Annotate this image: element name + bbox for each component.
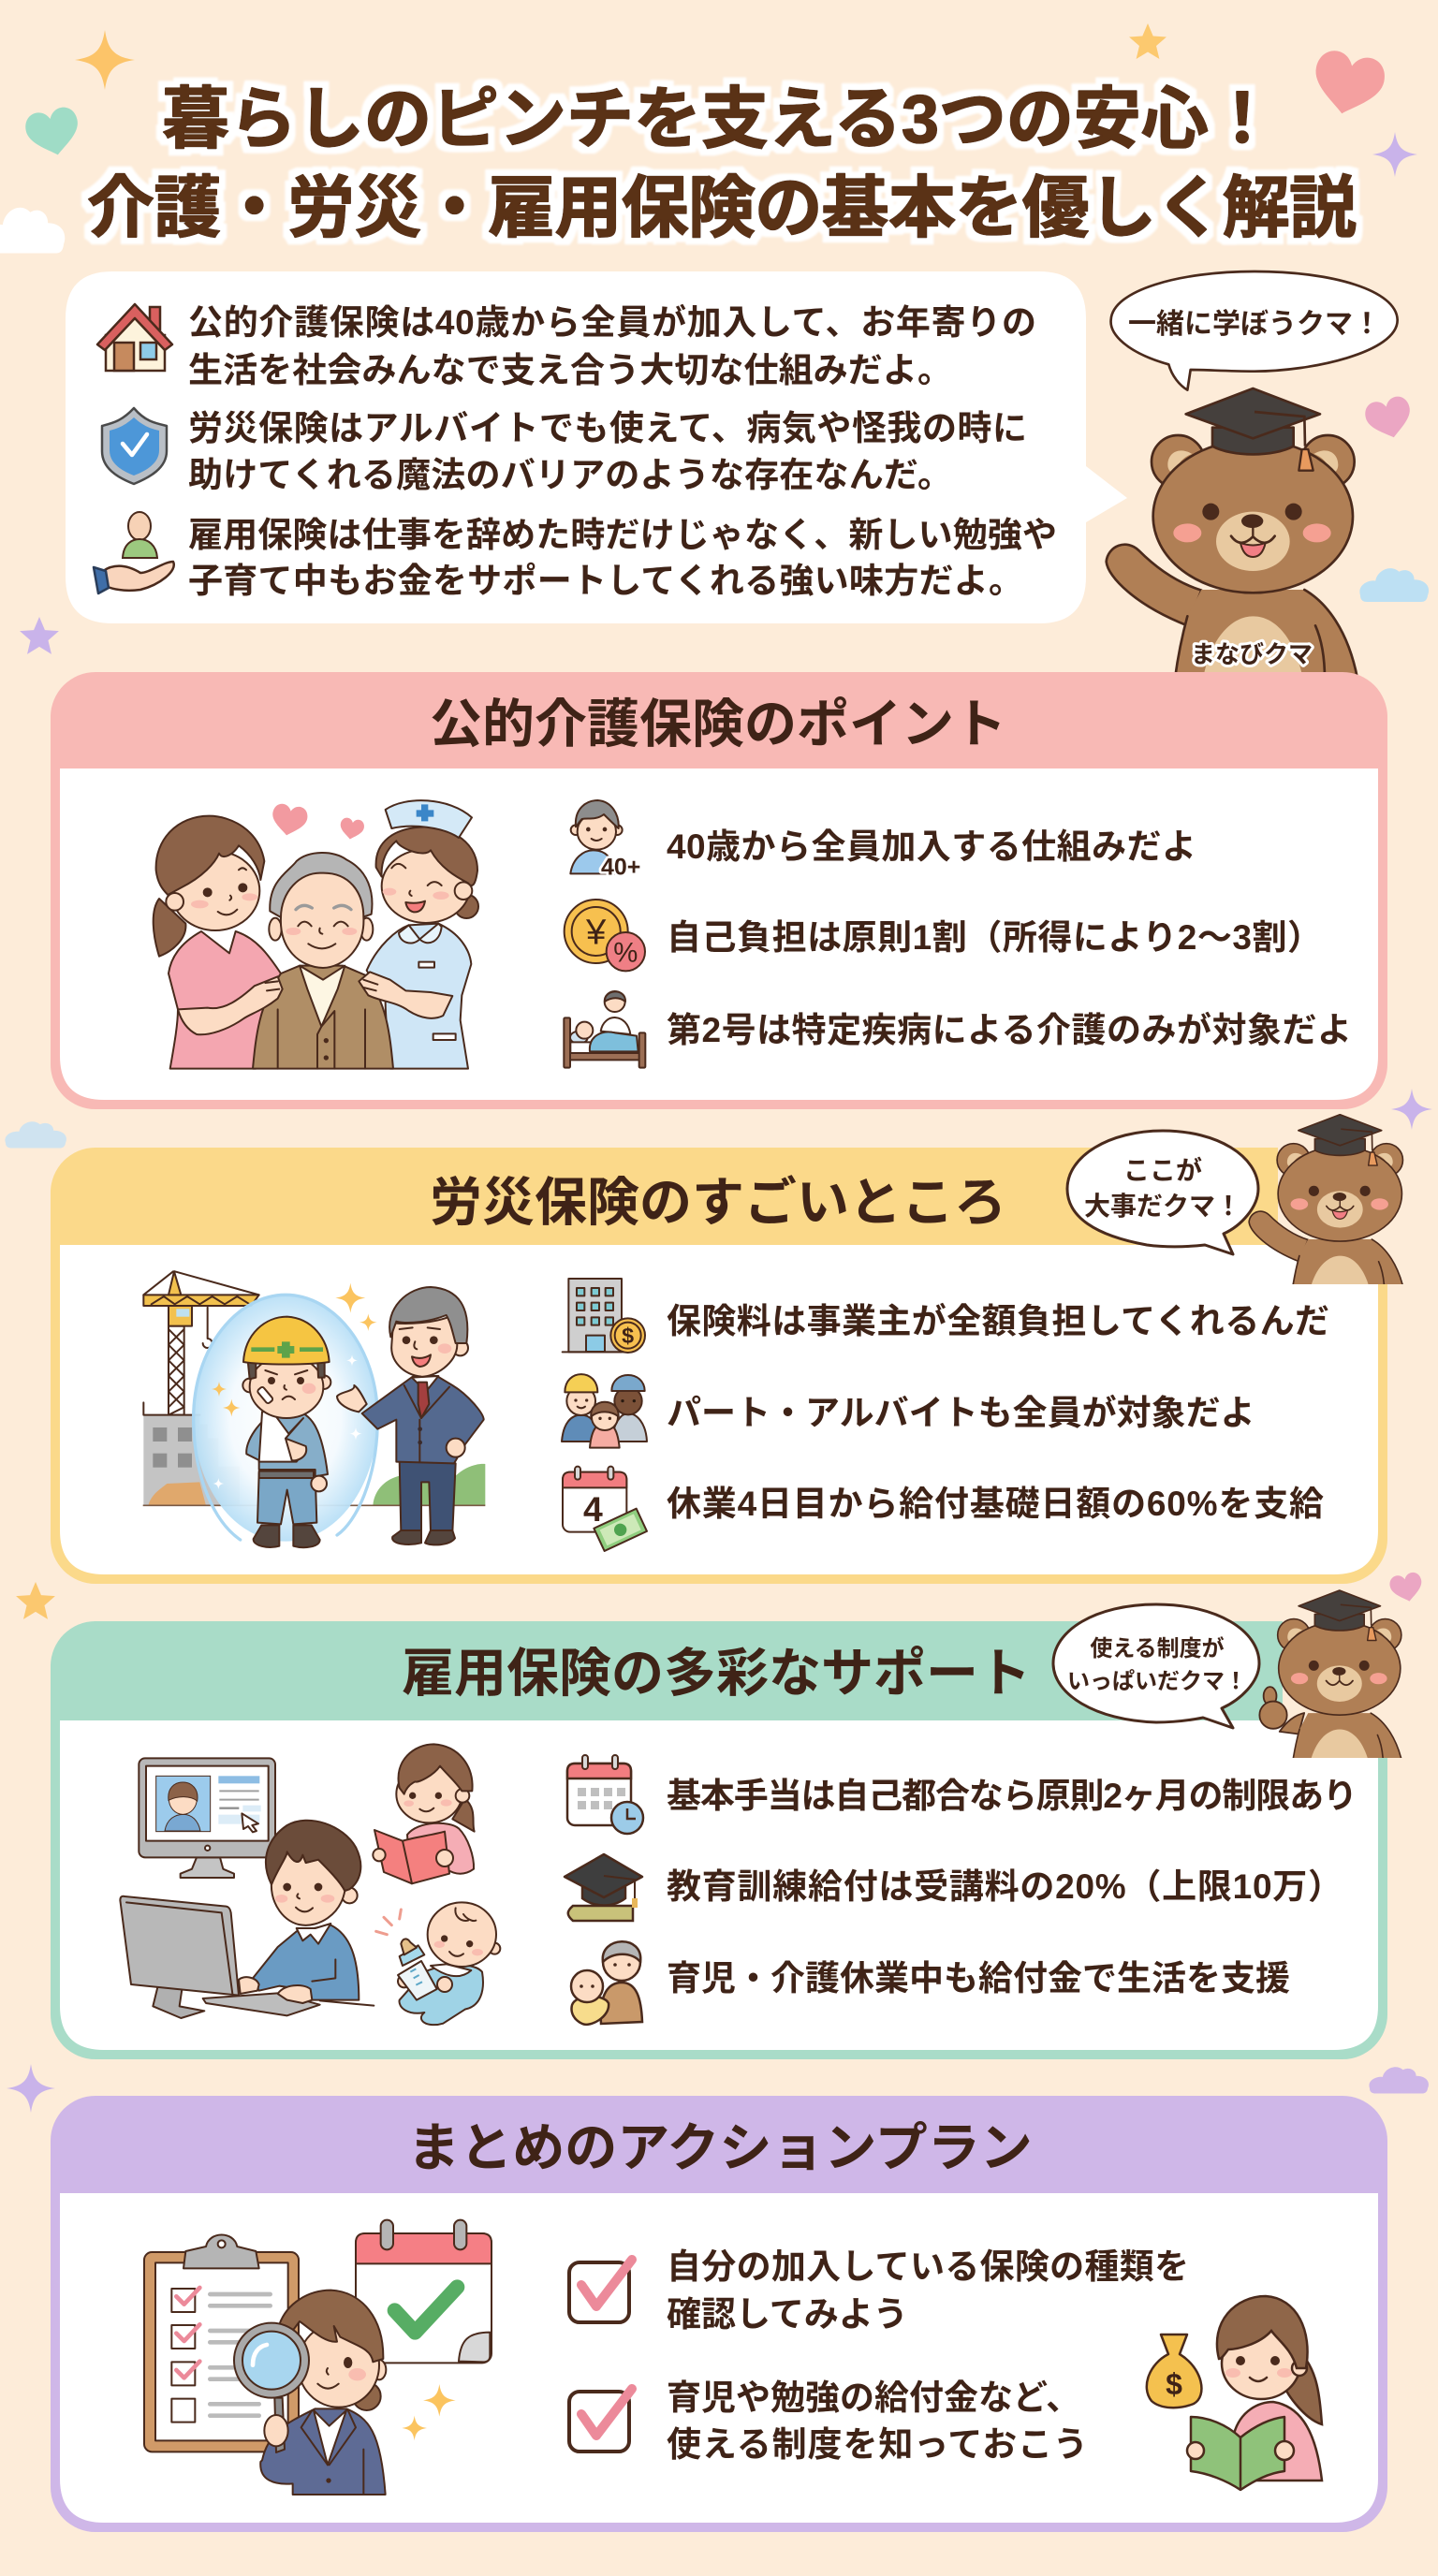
text: point 1: 基本手当は自己都合なら原則2ヶ月の制限あり [667, 1777, 1357, 1815]
text: action 1 line 1: 自分の加入している保険の種類を [667, 2247, 1189, 2286]
icon: grandmother and baby [571, 1941, 642, 2025]
text: intro line 3: 労災保険はアルバイトでも使えて、病気や怪我の時に [188, 409, 1027, 447]
text: bear speech line 2: いっぱいだクマ！ [1067, 1669, 1247, 1694]
text: bear speech line 2: 大事だクマ！ [1084, 1192, 1241, 1221]
text: intro line 6: 子育て中もお金をサポートしてくれる強い味方だよ。 [188, 562, 1023, 600]
icon: building and dollar coin [563, 1279, 645, 1353]
panel: 雇用保険の多彩なサポート [51, 1621, 1387, 2059]
icon: diverse workers [562, 1374, 647, 1448]
text: point 2: 教育訓練給付は受講料の20%（上限10万） [667, 1867, 1343, 1906]
text: action 1 line 2: 確認してみよう [667, 2295, 908, 2334]
patch behind bear 3 [1283, 1610, 1438, 1758]
heading: 公的介護保険のポイント [430, 695, 1006, 754]
icon: person over caring hand [94, 512, 174, 593]
text: bear speech: 一緒に学ぼうクマ！ [1128, 309, 1381, 340]
text: intro line 1: 公的介護保険は40歳から全員が加入して、お年寄りの [188, 303, 1036, 342]
icon: age 40+ person [570, 800, 640, 880]
icon: yen coin and percent: % [613, 937, 638, 968]
text: point 3: 第2号は特定疾病による介護のみが対象だよ [667, 1011, 1352, 1049]
icon: yen coin and percent: ¥ [585, 912, 607, 952]
panel: 労災保険のすごいところ [51, 1148, 1387, 1584]
title [87, 82, 1357, 246]
icon: checkbox 1 [569, 2260, 632, 2322]
mascot: bear with speech bubble, card 3 [1053, 1590, 1403, 1767]
illustration: job seeker, parent, baby [120, 1744, 500, 2025]
text: point 2: 自己負担は原則1割（所得により2～3割） [667, 918, 1322, 957]
icon: graduation cap and books [565, 1854, 642, 1921]
mascot: bear with speech bubble, card 2 [1067, 1115, 1405, 1295]
title: 介護・労災・雇用保険の基本を優しく解説 [87, 171, 1357, 246]
heading: 労災保険のすごいところ [430, 1173, 1006, 1232]
icon: calendar day 4 with money: 4 [583, 1489, 603, 1529]
icon: building and dollar coin: $ [622, 1324, 634, 1348]
illustration: carers with elderly man [154, 800, 478, 1069]
text: point 2: パート・アルバイトも全員が対象だよ [667, 1394, 1255, 1432]
illustration: checklist, calendar, woman with magnifier [144, 2220, 492, 2495]
text: point 1: 保険料は事業主が全額負担してくれるんだ [667, 1302, 1329, 1340]
mascot: manabi bear with bubble [1107, 271, 1398, 679]
text: action 2 line 1: 育児や勉強の給付金など、 [667, 2378, 1080, 2417]
text: bear speech line 1: 使える制度が [1090, 1635, 1225, 1661]
title: 暮らしのピンチを支える3つの安心！ [162, 82, 1276, 157]
illustration: injured worker protected by bubble, boss [143, 1271, 485, 1547]
panel: 公的介護保険のポイント [51, 672, 1387, 1109]
text: 40+ badge: 40+ [601, 854, 640, 880]
text: point 1: 40歳から全員加入する仕組みだよ [667, 827, 1196, 866]
heading: 雇用保険の多彩なサポート [402, 1644, 1031, 1703]
text: point 3: 育児・介護休業中も給付金で生活を支援 [667, 1959, 1290, 1998]
icon: calendar with clock [567, 1755, 643, 1834]
text: point 3: 休業4日目から給付基礎日額の60%を支給 [667, 1485, 1324, 1523]
text: bear speech line 1: ここが [1123, 1155, 1202, 1185]
text: intro line 5: 雇用保険は仕事を辞めた時だけじゃなく、新しい勉強や [188, 516, 1057, 554]
patch behind bear 2 [1278, 1140, 1438, 1284]
heading: まとめのアクションプラン [407, 2118, 1033, 2177]
text: bear name: まなびクマ [1191, 640, 1313, 668]
text: action 2 line 2: 使える制度を知っておこう [667, 2425, 1088, 2464]
icon: patient in bed with doctor [564, 991, 645, 1068]
illustration: girl with book and money bag [1147, 2296, 1322, 2490]
panel: まとめのアクションプラン [51, 2096, 1387, 2532]
illustration: girl with book and money bag: $ [1166, 2367, 1182, 2401]
icon: shield [102, 408, 167, 484]
icon: house [97, 304, 172, 371]
panel: intro speech bubble [66, 271, 1127, 623]
text: intro line 2: 生活を社会みんなで支え合う大切な仕組みだよ。 [188, 351, 952, 389]
icon: checkbox 2 [569, 2389, 632, 2452]
text: intro line 4: 助けてくれる魔法のバリアのような存在なんだ。 [188, 456, 952, 494]
icon: calendar day 4 with money [563, 1467, 647, 1551]
icon: yen coin and percent [565, 900, 645, 971]
